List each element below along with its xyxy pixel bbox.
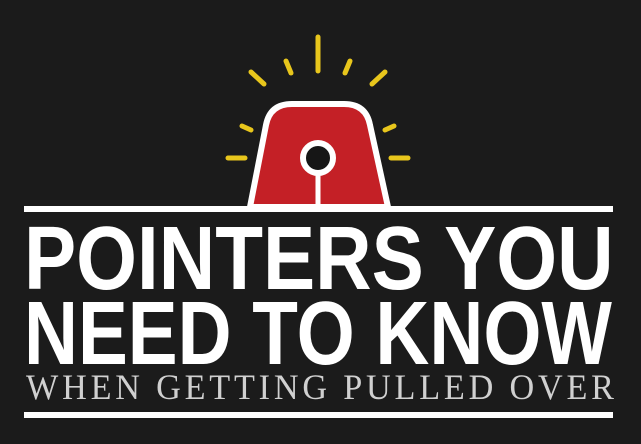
subtitle: WHEN GETTING PULLED OVER [26,367,618,407]
lines [24,206,613,212]
dome [250,104,388,207]
rays [228,37,408,158]
title line 1: POINTERS YOU [24,209,614,309]
title line 2: NEED TO KNOW [24,284,612,384]
